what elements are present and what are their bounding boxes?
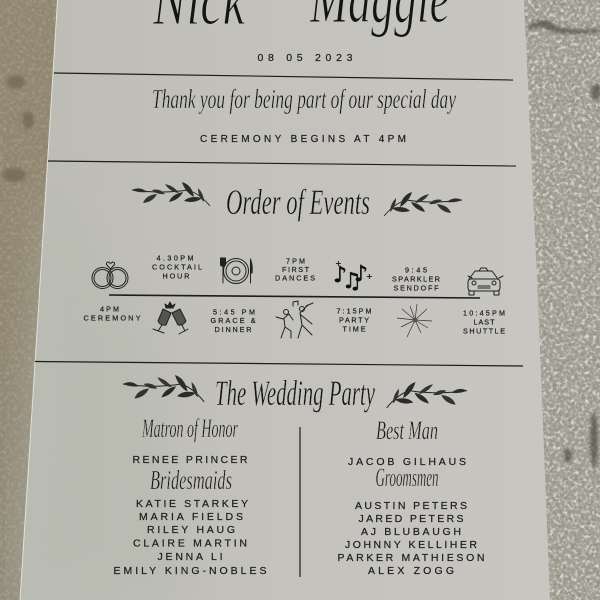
bridesmaid names	[114, 498, 266, 577]
event: party time: TIME	[342, 324, 366, 334]
groomsmen names: AJ BLUBAUGH	[361, 526, 461, 538]
event: first dances	[275, 256, 315, 282]
groomsmen names: PARKER MATHIESON	[338, 552, 484, 564]
icon: left sprig	[132, 182, 210, 206]
icon: wedding rings	[92, 262, 128, 288]
heading: matron of honor: Matron of Honor	[141, 414, 238, 443]
name: RENEE PRINCER	[132, 454, 248, 466]
order of events heading	[132, 182, 462, 222]
event: last shuttle: 10:45PM	[463, 308, 505, 318]
event: grace and dinner: DINNER	[214, 325, 252, 334]
event: ceremony: 4PM	[100, 304, 119, 314]
groom's side	[338, 416, 484, 577]
event: last shuttle	[463, 308, 505, 336]
groomsmen names: JARED PETERS	[358, 513, 464, 525]
event: sparkler sendoff	[392, 266, 440, 292]
groom's side: Groomsmen	[376, 463, 438, 492]
event: cocktail hour: HOUR	[162, 272, 190, 280]
groomsmen names: JOHNNY KELLIHER	[345, 539, 477, 551]
bridesmaid names: CLAIRE MARTIN	[133, 538, 247, 550]
event: cocktail hour	[152, 254, 202, 280]
date: 08 05 2023	[258, 52, 353, 64]
event: ceremony	[84, 304, 141, 322]
name: JACOB GILHAUS	[348, 456, 466, 468]
event: sparkler sendoff: SENDOFF	[394, 284, 439, 292]
event: cocktail hour: COCKTAIL	[152, 262, 202, 272]
groomsmen names	[338, 500, 484, 577]
event: first dances: FIRST	[282, 265, 310, 274]
icon: champagne flutes	[153, 302, 188, 334]
divider lines	[35, 73, 523, 366]
column divider	[299, 427, 301, 577]
heading text: Order of Events	[226, 182, 370, 222]
bride's side	[114, 414, 266, 577]
event: first dances: 7PM	[286, 256, 305, 266]
event: cocktail hour: 4.30PM	[156, 254, 194, 262]
bridesmaid names: EMILY KING-NOBLES	[114, 565, 266, 577]
event: ceremony: CEREMONY	[84, 314, 141, 322]
bridesmaid names: KATIE STARKEY	[136, 498, 248, 510]
heading text: The Wedding Party	[215, 373, 375, 413]
event: party time: PARTY	[339, 316, 369, 324]
wedding party heading	[123, 373, 467, 413]
event: grace and dinner: 5:45 PM	[213, 308, 255, 316]
icon: music notes: ♪	[354, 262, 368, 287]
icon: right sprig	[387, 382, 467, 408]
icon: music notes	[333, 259, 373, 294]
icon: music notes: ♪	[333, 263, 347, 288]
ceremony start time: CEREMONY BEGINS AT 4PM	[200, 134, 406, 145]
icon: right sprig	[384, 192, 462, 216]
event: party time	[336, 306, 372, 334]
groomsmen names: AUSTIN PETERS	[355, 500, 467, 512]
heading: best man: Best Man	[376, 416, 438, 445]
icon: taxi	[468, 268, 503, 295]
event: sparkler sendoff: SPARKLER	[392, 274, 440, 284]
timeline axis	[109, 295, 480, 298]
icon: music notes: +	[335, 259, 342, 268]
icon: dancing couple	[276, 301, 313, 338]
groomsmen names: ALEX ZOGG	[368, 565, 454, 577]
bridesmaid names: MARIA FIELDS	[139, 511, 243, 523]
icon: left sprig	[123, 375, 204, 402]
bridesmaid names: RILEY HAUG	[147, 524, 235, 536]
event: sparkler sendoff: 9:45	[405, 266, 427, 274]
event: grace and dinner	[210, 308, 256, 334]
event: first dances: DANCES	[275, 274, 315, 282]
event: last shuttle: LAST	[474, 318, 495, 326]
icon: plate and cutlery	[220, 258, 252, 284]
timeline	[84, 254, 505, 338]
heading: bridesmaids: Bridesmaids	[150, 465, 232, 495]
event: party time: 7:15PM	[336, 306, 372, 316]
event: grace and dinner: GRACE &	[210, 316, 256, 325]
bridesmaid names: JENNA LI	[158, 551, 222, 563]
event: last shuttle: SHUTTLE	[463, 326, 505, 336]
icon: music notes: +	[366, 272, 373, 281]
icon: music notes: ♫	[342, 269, 362, 294]
names heading	[152, 0, 450, 40]
icon: sparkler	[397, 304, 432, 337]
